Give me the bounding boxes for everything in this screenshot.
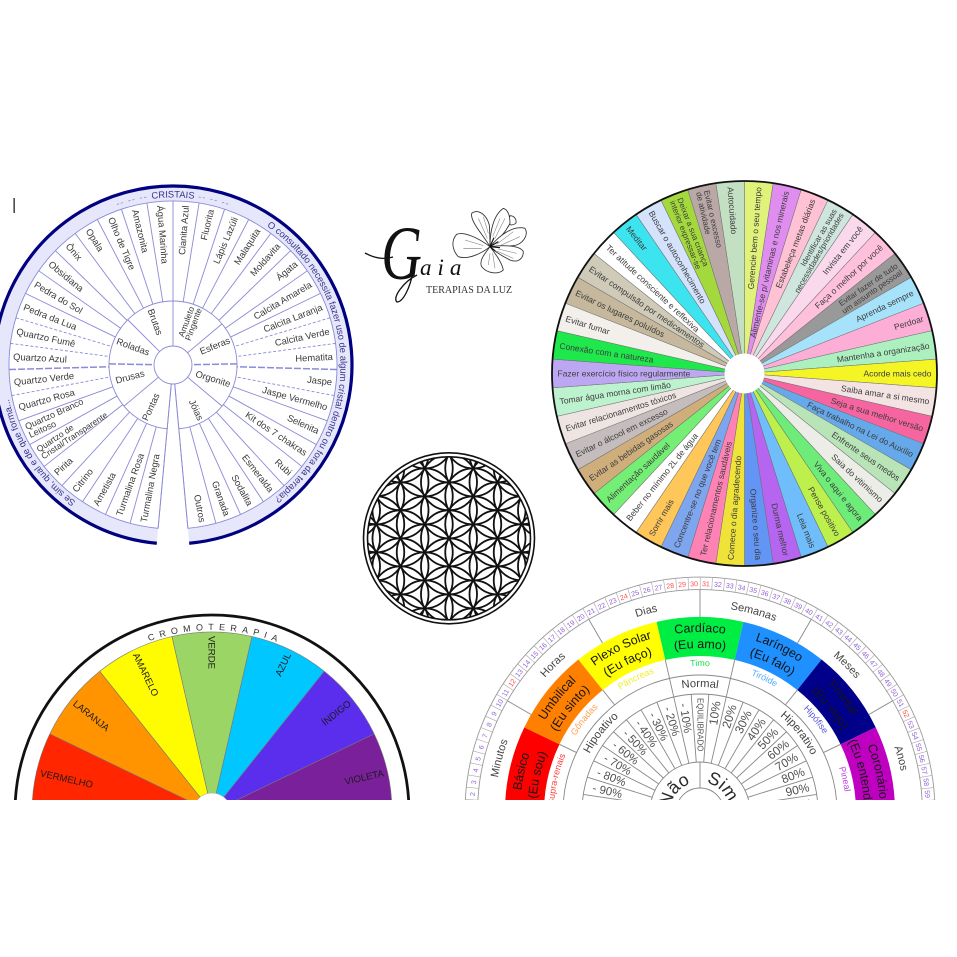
sector labels	[558, 186, 932, 561]
logo subtitle: TERAPIAS DA LUZ	[426, 285, 512, 296]
coloured sectors	[550, 179, 939, 568]
outer ring labels: crystals: Quartzo Azul	[13, 351, 67, 365]
inner rings and dividers	[508, 590, 892, 812]
percentage labels: EQUILIBRADO	[695, 698, 704, 751]
percentage labels: - 70%	[601, 753, 633, 778]
number scale 1 to 60: 60	[924, 802, 931, 810]
number scale 1 to 60: 8	[486, 722, 494, 728]
number scale 1 to 60: 37	[771, 593, 781, 602]
number scale 1 to 60: 16	[538, 642, 549, 652]
band follow-up text: Se sim, qual e de que forma...	[6, 400, 75, 506]
outer ring labels: crystals: Malaquita	[231, 226, 263, 267]
outer ring labels: crystals: Calcita Amarela	[251, 278, 314, 322]
inner ring labels: crystal formats: Pontas	[139, 391, 162, 422]
sector labels: Fazer exercício físico regularmente	[558, 368, 691, 378]
percentage labels: 60%	[764, 737, 792, 763]
number scale 1 to 60: 50	[889, 688, 899, 698]
outer ring labels: crystals: Citrino	[70, 466, 95, 494]
icon: flower of life	[362, 452, 536, 625]
centre hole	[197, 792, 227, 800]
outer ring labels: crystals: Ônix	[64, 241, 85, 263]
chakra names: Coronário	[868, 744, 888, 798]
centre labels: não and sim: Sim	[708, 772, 736, 800]
sector labels: Faça trabalho na Lei do Auxílio	[806, 399, 915, 459]
number scale 1 to 60: 43	[833, 627, 844, 637]
outer ring labels: crystals: Quartzo Fumê	[15, 326, 76, 349]
outer ring labels: crystals: Opala	[84, 226, 107, 254]
sector labels: de atividade	[694, 191, 713, 236]
logo: Gaia Terapias da Luz	[365, 208, 526, 302]
number scale 1 to 60: 15	[530, 650, 540, 661]
inner ring labels: crystal formats: Esferas	[198, 334, 232, 357]
sector labels: Identificar as suas	[799, 208, 839, 268]
sector labels: Sorrir mais	[647, 497, 676, 538]
percentage labels: - 60%	[610, 740, 641, 768]
chakra names: Laríngeo	[756, 632, 802, 661]
outer ring labels: crystals: Turmalina Negra	[138, 452, 162, 523]
percentage labels: - 50%	[620, 728, 649, 758]
sector labels: Aprenda sempre	[854, 288, 915, 324]
percentage labels: - 40%	[632, 718, 659, 750]
number scale 1 to 60: 53	[905, 720, 915, 730]
sector labels: Saia do vitimismo	[829, 452, 885, 505]
colour names: AZUL	[273, 651, 294, 678]
sector labels: Evitar o álcool em excesso	[574, 406, 670, 459]
number scale 1 to 60: 5	[475, 756, 483, 762]
gland labels: Tiróide	[753, 669, 777, 686]
number scale 1 to 60: 10	[495, 698, 505, 709]
sector labels: Perdoar	[893, 314, 925, 332]
number scale 1 to 60: 21	[586, 607, 597, 617]
outer ring labels: crystals: Fluorita	[198, 207, 216, 241]
chakra names: (Eu vejo)	[812, 687, 848, 730]
sector labels: Durma melhor	[769, 502, 791, 557]
sector labels: Alimente-se p/ vitaminas e nos minerais	[748, 190, 791, 339]
outer lavender band	[0, 187, 351, 542]
chakra names: Frontal	[828, 680, 860, 715]
sector labels: Viva o aqui e agora	[812, 459, 865, 523]
number scale 1 to 60: 6	[478, 744, 486, 750]
outer ring labels: crystals: Água Marinha	[155, 205, 171, 265]
outer ring labels: crystals: Cristal/Transparente	[39, 410, 110, 461]
script wordmark: Gaia: G	[381, 212, 422, 296]
activity labels: Hiperativo	[780, 710, 816, 754]
sector labels: Conexão com a natureza	[559, 341, 655, 365]
number scale 1 to 60: 27	[654, 584, 663, 593]
icon: flower	[453, 208, 526, 273]
outer ring labels: crystals: Jaspe Vermelho	[261, 384, 329, 412]
sector labels: necessidades/prioridades	[793, 212, 846, 295]
percentage labels: - 30%	[646, 711, 670, 743]
outer ring labels: crystals: Quartzo Branco	[23, 396, 85, 432]
sector labels: Faça o melhor por você	[813, 242, 885, 311]
percentage labels: 100%	[781, 797, 813, 813]
chakra names: Cardíaco	[674, 622, 726, 634]
sector labels: Mantenha a organização	[836, 341, 930, 365]
outer ring labels: crystals: Calcita Verde	[274, 326, 331, 348]
percentage labels: - 100%	[590, 799, 627, 813]
number scale 1 to 60: 55	[913, 743, 922, 752]
outer ring labels: crystals: Hematita	[295, 351, 334, 364]
panel: chakra pendulum chart	[464, 576, 936, 800]
navy outer rim	[0, 186, 352, 543]
outer ring labels: crystals: Pedra da Lua	[22, 301, 79, 332]
panel: habits wheel	[550, 179, 939, 568]
sector labels: Estabeleça metas diárias	[773, 198, 817, 290]
outer ring labels: crystals: Leitoso	[27, 419, 58, 440]
gland labels: Hipófise	[804, 705, 827, 734]
panel: cromoterapia wheel	[14, 614, 410, 800]
number scale 1 to 60: 51	[895, 698, 905, 709]
centre labels: não and sim	[659, 772, 736, 800]
percentage labels: 80%	[779, 764, 807, 786]
number scale 1 to 60: 52	[900, 709, 910, 719]
number scale 1 to 60: 9	[491, 711, 499, 717]
number scale 1 to 60: 25	[631, 590, 640, 599]
inner ring labels: crystal formats: Jóias	[187, 398, 206, 422]
sector labels: Seja a sua melhor versão	[830, 395, 925, 433]
sector labels: interior expressar-se	[668, 199, 703, 271]
inner ring labels: crystal formats: Brutas	[146, 307, 165, 337]
inner ring labels: crystal formats: Drusas	[114, 367, 146, 386]
sector labels: Saiba amar a si mesmo	[840, 383, 930, 406]
band question text: O consultado necessita fazer uso de algum cristal dentro ou fora da terapia?	[268, 222, 348, 502]
number scale 1 to 60: 28	[666, 583, 675, 591]
number scale 1 to 60: 41	[814, 613, 824, 623]
activity labels	[583, 680, 816, 754]
number scale 1 to 60: 33	[725, 583, 734, 591]
gland labels: Timo	[690, 660, 710, 666]
sector labels: Beber no mínimo 2L de água	[624, 431, 700, 523]
script wordmark: Gaia: aia	[420, 255, 467, 280]
number scale 1 to 60: 30	[690, 581, 698, 588]
chakra names: Umbilical	[538, 675, 576, 719]
number scale 1 to 60: 13	[515, 668, 525, 679]
sector labels: Evitar as bebidas gasosas	[587, 419, 675, 483]
outer ring labels: crystals: Ágata	[274, 258, 300, 283]
colour sectors	[32, 632, 392, 800]
number scale 1 to 60: 24	[619, 593, 629, 602]
chakra names: Plexo Solar	[590, 632, 650, 666]
inner ring labels: crystal formats: Pingente	[183, 306, 204, 342]
sector labels: Evitar o excesso	[702, 189, 724, 249]
number scale 1 to 60: 1	[469, 804, 476, 808]
time unit labels: Horas	[540, 654, 565, 678]
sector labels: Buscar o autoconhecimento	[647, 209, 708, 306]
number scale 1 to 60: 2	[470, 792, 477, 796]
double outer ring	[364, 453, 534, 624]
number scale 1 to 60: 29	[678, 582, 686, 589]
colour names: ÍNDIGO	[320, 699, 354, 728]
percentage labels: 90%	[784, 780, 811, 799]
outer ring labels: crystals: Quartzo Rosa	[17, 386, 77, 412]
sector labels: Invista em você	[820, 224, 865, 277]
percentage labels: - 90%	[591, 783, 623, 801]
outer ring labels: crystals: Sodalita	[229, 473, 256, 508]
outer ring labels: crystals: Rubi	[273, 456, 294, 478]
number scale 1 to 60: 22	[597, 602, 607, 612]
small black tick mark	[14, 198, 15, 213]
number scale 1 to 60: 7	[482, 733, 490, 739]
gland labels: Pineal	[839, 766, 851, 792]
colour names: LARANJA	[70, 699, 112, 734]
outer ring labels: crystals: Cianita Azul	[176, 205, 191, 255]
number scale 1 to 60: 57	[919, 766, 928, 775]
gland labels	[548, 660, 851, 800]
percentage labels: - 10%	[677, 702, 693, 734]
outer ring labels: crystals: Amazonita	[130, 208, 151, 255]
outer ring labels: crystals: Olho de Tigre	[106, 215, 138, 271]
inner ring labels: crystal formats: Roladas	[115, 335, 152, 358]
outer ring labels: crystals: Moldavita	[248, 240, 283, 278]
outer ring labels: crystals: Pedra do Sol	[32, 279, 85, 316]
outer ring labels: crystals: Quartzo de	[35, 422, 76, 454]
number scale 1 to 60: 20	[576, 613, 586, 623]
sector labels: Concentre-se no que você tem	[672, 438, 723, 549]
outer ring labels: crystals: Esmeralda	[240, 452, 277, 495]
number scale 1 to 60: 26	[642, 587, 652, 595]
number scale 1 to 60: 4	[473, 768, 480, 773]
percentage labels: 20%	[719, 703, 740, 730]
number scale 1 to 60: 42	[824, 620, 834, 630]
percentage labels: 40%	[744, 715, 769, 743]
script wordmark: Gaia	[365, 212, 467, 302]
number scale 1 to 60: 54	[910, 731, 919, 741]
number scale 1 to 60: 44	[842, 634, 853, 644]
sector labels: Deixar a sua criança	[675, 197, 710, 268]
colour names: VIOLETA	[344, 768, 386, 788]
time unit labels: Dias	[635, 606, 657, 617]
chakra names: (Eu entendo)	[847, 740, 873, 800]
percentage labels: - 20%	[661, 705, 681, 738]
wheel title: CROMOTERAPIA	[148, 624, 276, 642]
colour names	[39, 636, 386, 791]
colour names: VERDE	[206, 636, 217, 669]
outer ring labels: crystals: Lápis Lazúli	[211, 215, 240, 265]
outer ring labels: crystals: Kit dos 7 chakras	[243, 409, 310, 458]
sector labels: Evitar fazer de tudo	[837, 261, 900, 308]
number scale 1 to 60: 47	[868, 659, 878, 670]
number scale 1 to 60: 56	[917, 754, 925, 764]
outer ring labels: crystals: Granada	[210, 479, 233, 518]
percentage labels: - 80%	[595, 767, 627, 789]
chakra names	[512, 622, 888, 800]
sector labels: Acorde mais cedo	[863, 368, 932, 378]
number scale 1 to 60: 38	[782, 597, 792, 607]
centre hole	[724, 354, 764, 394]
ring structure	[465, 577, 935, 812]
sector labels: Comece o dia agradecendo	[726, 455, 743, 560]
inner ring labels: crystal formats	[114, 304, 232, 422]
number scale 1 to 60: 17	[547, 634, 558, 644]
time unit labels: Semanas	[731, 602, 776, 621]
percentage labels: 30%	[732, 708, 755, 736]
outer ring labels: crystals: Outros	[192, 494, 208, 524]
colour names: AMARELO	[130, 651, 160, 698]
percentage labels: 70%	[773, 750, 801, 774]
number scale 1 to 60: 23	[608, 597, 618, 607]
sector labels: Evitar os lugares poluídos	[574, 288, 666, 339]
time unit labels: Minutos	[490, 740, 508, 777]
gland labels: Supra-renais	[548, 754, 565, 800]
chakra names: (Eu falo)	[750, 648, 794, 676]
number scale 1 to 60: 11	[501, 688, 511, 698]
percentage labels	[593, 698, 810, 800]
sector labels: Alimentação saudável	[604, 440, 672, 504]
outer ring labels: crystals: Turmalina Rosa	[114, 451, 146, 517]
number scale 1 to 60: 12	[508, 678, 518, 688]
time unit labels: Anos	[894, 747, 906, 771]
sector labels: um assunto pessoal	[840, 268, 904, 316]
outer ring labels: crystals	[13, 205, 334, 524]
time unit labels	[490, 602, 906, 777]
time unit labels: Meses	[834, 651, 860, 678]
number scale 1 to 60: 31	[702, 581, 710, 588]
number scale 1 to 60: 39	[793, 602, 803, 612]
sector labels: Gerencie bem o seu tempo	[746, 186, 763, 290]
sector labels: Autocuidado	[726, 187, 739, 235]
black outer rim	[15, 615, 409, 812]
white inner disc	[9, 201, 337, 528]
sector labels: Evitar relacionamentos tóxicos	[564, 390, 677, 433]
number scale 1 to 60: 19	[566, 620, 577, 630]
outer ring labels: crystals: Selenita	[286, 412, 322, 436]
number scale 1 to 60: 36	[760, 590, 769, 599]
percentage labels: 10%	[706, 700, 724, 726]
number scale 1 to 60: 49	[882, 678, 892, 689]
number scale 1 to 60: 45	[851, 642, 862, 652]
outer ring labels: crystals: Ametista	[91, 470, 118, 508]
gland labels: Gônadas	[571, 704, 598, 734]
spoke lines	[9, 201, 337, 528]
chakra names: (Eu sinto)	[550, 686, 590, 731]
inner ring labels: crystal formats: Orgonite	[194, 368, 232, 389]
outer ring labels: crystals: Calcita Laranja	[262, 301, 325, 334]
gland labels: Pâncreas	[618, 669, 654, 690]
band title: cristais: -- -- -- CRISTAIS -- -- --	[116, 190, 228, 205]
sector labels: Leia mais	[795, 512, 817, 549]
chakra names: (Eu amo)	[674, 640, 726, 652]
outer ring labels: crystals: Jaspe	[307, 374, 333, 387]
number scale 1 to 60: 3	[471, 780, 478, 785]
sector labels: Evitar fumar	[564, 314, 611, 337]
panel: cristais wheel	[0, 184, 354, 545]
outer ring labels: crystals: Pirita	[52, 454, 75, 478]
sector labels: Meditar	[624, 224, 650, 253]
number scale 1 to 60: 35	[748, 587, 758, 595]
inner ring labels: crystal formats: Amuleto	[176, 305, 196, 338]
sector labels: Evitar compulsão por medicamentos	[587, 264, 706, 350]
number scale 1 to 60: 18	[556, 626, 567, 637]
number scale 1 to 60: 34	[737, 584, 746, 593]
number scale 1 to 60: 46	[860, 650, 870, 661]
chakra names: Básico	[512, 753, 529, 790]
lattice of circles	[368, 458, 530, 619]
outer ring labels: crystals: Obsidiana	[46, 258, 87, 294]
sector labels: Ter atitude consciente e reflexiva	[604, 243, 702, 334]
number scale 1 to 60: 40	[803, 607, 814, 617]
percentage labels: 50%	[755, 725, 782, 752]
number scale 1 to 60: 32	[714, 582, 722, 589]
colour names: VERMELHO	[39, 768, 94, 791]
number scale 1 to 60	[469, 581, 931, 810]
chakra names: (Eu sou)	[528, 752, 548, 798]
sector labels: Ter relacionamentos saudáveis	[698, 440, 734, 557]
sector labels: Pense positivo	[806, 485, 842, 538]
sector labels: Organize o seu dia	[748, 488, 763, 561]
number scale 1 to 60: 14	[522, 659, 532, 670]
chakra bands	[505, 616, 895, 800]
activity labels: Hipoativo	[583, 714, 618, 753]
number scale 1 to 60: 58	[921, 778, 929, 787]
number scale 1 to 60: 59	[923, 790, 930, 798]
number scale 1 to 60: 48	[875, 668, 886, 679]
outer ring labels: crystals: Quartzo Verde	[13, 370, 75, 387]
activity labels: Normal	[682, 680, 718, 688]
sector labels: Enfrente seus medos	[830, 429, 902, 483]
centre labels: não and sim: Não	[659, 776, 688, 800]
sector labels: Tomar água morna com limão	[559, 380, 672, 406]
chakra names: (Eu faço)	[604, 647, 652, 678]
wheel rim	[552, 181, 937, 566]
